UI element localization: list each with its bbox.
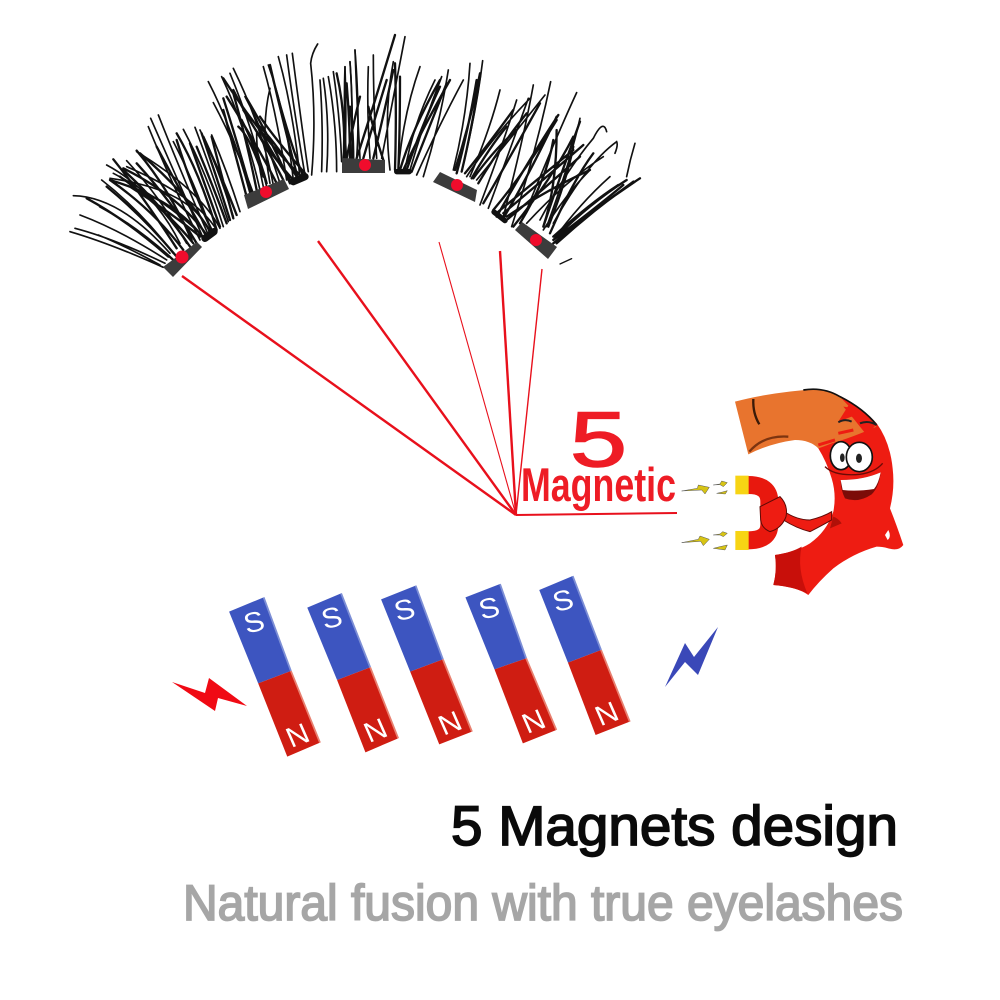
icon: blue lightning bolt [665, 627, 718, 687]
bar magnet 4 [465, 584, 556, 743]
bar magnet 1: S [240, 605, 268, 640]
hand [760, 497, 787, 532]
bar magnet 2: S [318, 601, 346, 636]
lash fibres: right half [345, 35, 640, 264]
magnet sparks [682, 481, 727, 550]
bar magnet 2 [307, 593, 398, 752]
bar magnet 5: S [549, 583, 577, 618]
label: Magnetic: Magnetic [521, 458, 676, 511]
bar magnet 1 [229, 597, 320, 757]
bar magnet 3: S [391, 593, 419, 628]
cartoon magnet character [735, 389, 903, 595]
horseshoe magnet [748, 485, 769, 540]
eyelash strip [70, 35, 640, 277]
mouth [841, 472, 881, 500]
bar magnet 4: N [517, 703, 550, 740]
bar magnet 3 [381, 586, 472, 744]
orange upper arm [735, 389, 877, 454]
subheading: Natural fusion with true eyelashes [183, 875, 903, 931]
icon: red lightning bolt [172, 678, 247, 711]
heading: 5 Magnets design [451, 794, 898, 857]
adhesive pad 2 with magnet dot [244, 179, 289, 209]
bar magnet 2: N [359, 712, 392, 749]
adhesive pad 1 with magnet dot [163, 242, 202, 277]
adhesive pad 3 with magnet dot [342, 158, 385, 173]
red body [773, 393, 903, 595]
bar magnet 4: S [475, 591, 503, 626]
bar magnet 5 [539, 576, 630, 735]
bar magnets [229, 576, 630, 757]
bar magnet 5: N [590, 696, 624, 733]
adhesive pad 5 with magnet dot [515, 222, 557, 259]
label: number 5: 5 [570, 395, 627, 483]
arm [783, 511, 832, 532]
adhesive pad 4 with magnet dot [433, 172, 477, 202]
lash fibres: left half [70, 44, 358, 267]
bar magnet 1: N [281, 717, 314, 754]
red pointer lines from magnets to label [182, 241, 677, 515]
eyes [830, 442, 852, 470]
bar magnet 3: N [433, 705, 467, 742]
